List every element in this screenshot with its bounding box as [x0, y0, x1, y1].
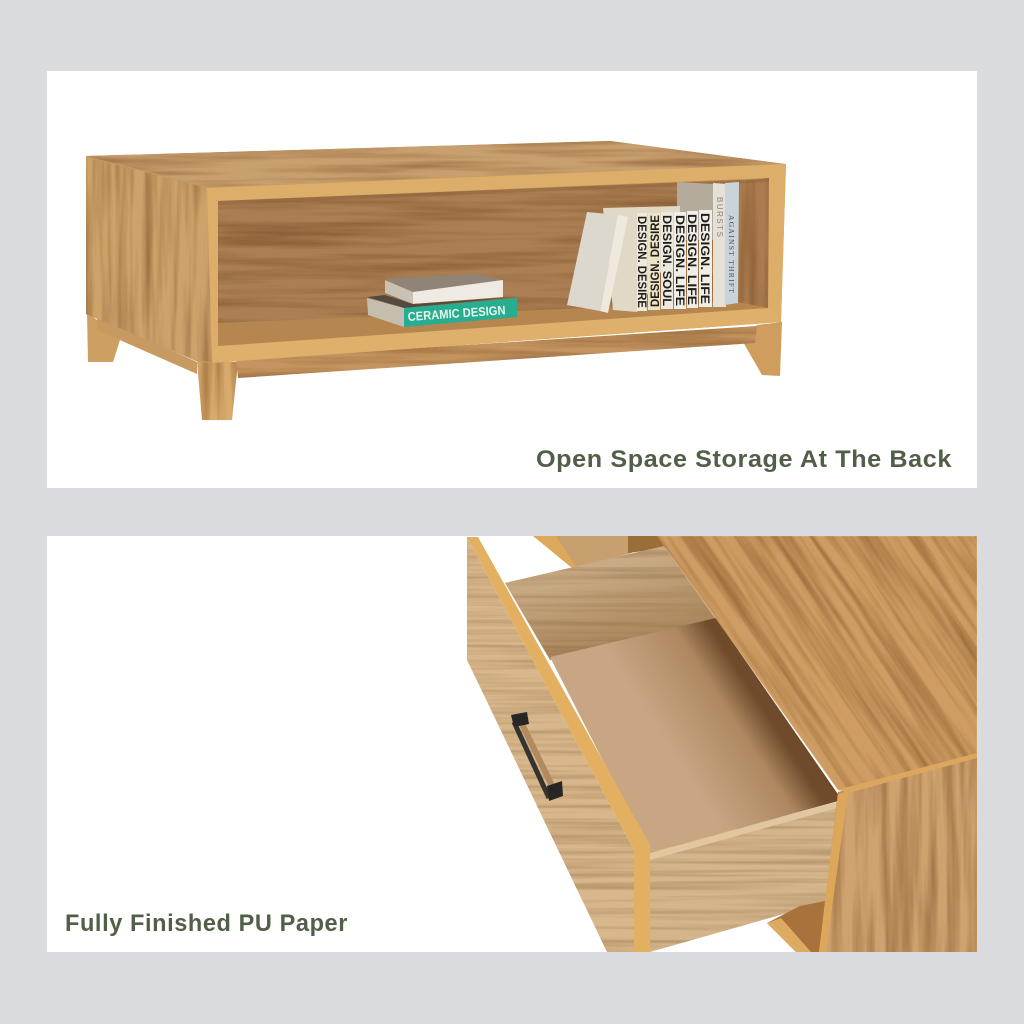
side face	[86, 157, 212, 362]
lower frame edge	[213, 308, 782, 362]
bottom panel: drawer close-up	[47, 536, 977, 952]
teal Ceramic Design book: CERAMIC DESIGN	[407, 303, 506, 324]
spine: Design. Desire 1: DESIGN. DESIRE	[635, 216, 647, 308]
bottom rail	[236, 326, 757, 378]
drawer yellow edge	[467, 537, 650, 952]
caption: PU paper: Fully Finished PU Paper	[65, 910, 348, 937]
blue Against Thrift book: AGAINST THRIFT	[727, 215, 736, 293]
spine: Design. Soul: DESIGN. SOUL	[660, 215, 672, 306]
Design spines	[635, 210, 712, 311]
under-drawer rail	[767, 900, 830, 952]
right leg	[743, 322, 782, 376]
table side edge	[819, 791, 848, 952]
right inner wall	[738, 178, 769, 309]
coffee table, rear view	[86, 141, 786, 420]
body silhouette	[86, 141, 786, 363]
rear opening back wall	[218, 180, 742, 323]
Bursts book	[677, 182, 726, 307]
drawer handle	[511, 712, 563, 801]
shelf surface	[218, 302, 769, 346]
drawer floor	[550, 618, 842, 853]
drawer back wall	[505, 546, 720, 660]
open drawer and table corner	[467, 536, 977, 952]
upper frame shade	[218, 178, 769, 205]
white book	[385, 274, 503, 304]
caption: open space storage: Open Space Storage At The Back	[536, 446, 952, 473]
cream cover	[603, 206, 680, 312]
spine: Design. Life 2: DESIGN. LIFE	[685, 214, 697, 305]
stacked books	[367, 274, 517, 327]
rear table section	[533, 536, 668, 568]
top panel: open space storage	[47, 71, 977, 488]
front-left leg	[197, 361, 238, 420]
spine: Design. Life 1: DESIGN. LIFE	[673, 215, 685, 306]
front frame	[207, 164, 786, 363]
Bursts book: BURSTS	[715, 197, 724, 237]
spine: Design. Life 3: DESIGN. LIFE	[698, 213, 710, 304]
blue Against Thrift book	[725, 182, 739, 305]
table top	[657, 536, 977, 791]
spine: Design. Desire 2: DESIGN. DESIRE	[650, 215, 662, 307]
drawer side panel	[650, 802, 837, 952]
leaning book	[567, 212, 628, 313]
upright books	[567, 182, 739, 313]
table top surface	[86, 141, 785, 187]
table top front edge	[838, 753, 977, 793]
drawer front face	[467, 537, 634, 952]
teal Ceramic Design book	[367, 295, 517, 327]
rear-left leg	[87, 312, 120, 362]
table side face	[819, 756, 977, 952]
side apron	[97, 317, 197, 374]
drawer side top edge	[650, 802, 837, 860]
